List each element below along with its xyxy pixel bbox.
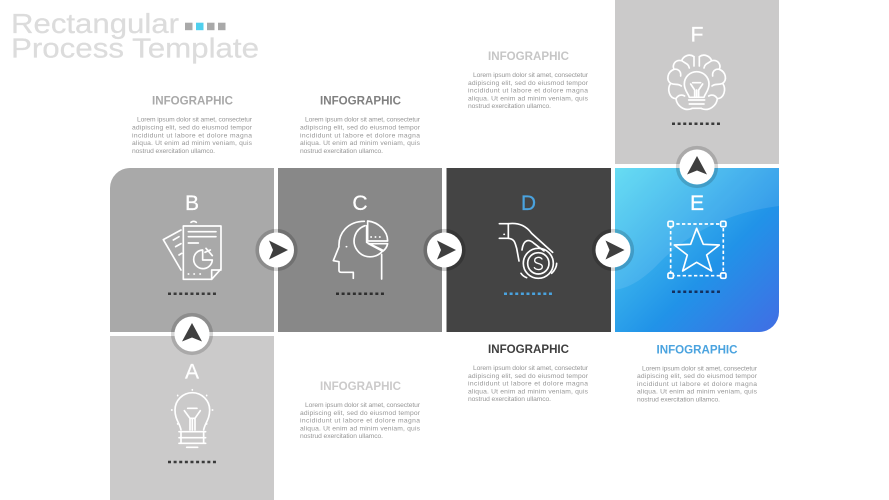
icon: star in dashed frame	[668, 221, 726, 278]
text block: F: INFOGRAPHIC	[488, 51, 569, 63]
arrow: A to B	[173, 315, 211, 353]
panel: C: C	[352, 192, 368, 215]
text block: B	[132, 96, 253, 155]
arrow: E to F	[678, 148, 716, 186]
panel: C	[278, 168, 442, 332]
icon: head with pie chart	[333, 221, 388, 279]
text block: E	[637, 344, 758, 404]
panel: D: D	[521, 192, 536, 215]
text block: E: INFOGRAPHIC	[656, 344, 738, 356]
arrow: B to C	[257, 231, 296, 269]
panel: F: F	[691, 24, 703, 47]
panel: F	[615, 0, 779, 164]
panel: E: E	[690, 192, 704, 215]
text block: A	[300, 381, 421, 440]
panel: B: B	[185, 192, 199, 215]
icon: light bulb	[172, 390, 213, 447]
panel: D	[446, 168, 611, 332]
arrow: C to D	[425, 231, 464, 269]
text block: A: INFOGRAPHIC	[320, 381, 401, 393]
text block: C	[300, 96, 421, 155]
text block: C: INFOGRAPHIC	[320, 96, 401, 108]
panel: B	[110, 168, 274, 332]
title	[11, 8, 259, 64]
icon: hand with coin	[499, 223, 557, 278]
text block: D: INFOGRAPHIC	[488, 344, 569, 356]
panel: E	[615, 168, 779, 332]
panel: A: A	[185, 360, 199, 383]
icon: brain with bulb	[668, 55, 725, 109]
arrow: D to E	[594, 231, 632, 269]
text block: D	[468, 344, 589, 403]
title: Rectangular	[11, 8, 179, 39]
icon: documents with chart	[163, 221, 221, 279]
title squares	[185, 23, 226, 30]
text block: B: INFOGRAPHIC	[152, 96, 233, 108]
text block: F	[468, 51, 589, 110]
panel: A	[110, 336, 274, 500]
title: Process Template	[11, 32, 259, 64]
